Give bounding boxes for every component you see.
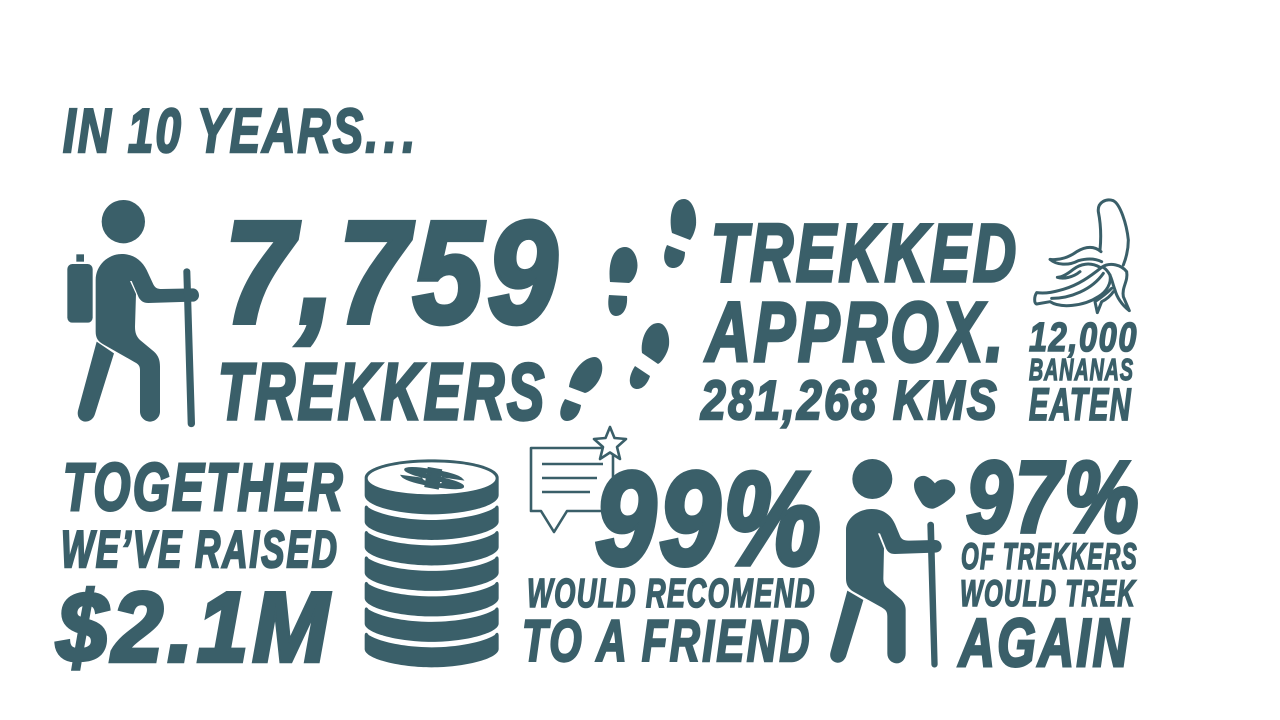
heading: together: TOGETHER	[63, 450, 345, 525]
icon: hiker with backpack	[67, 200, 199, 427]
icon: footprints	[560, 199, 696, 421]
stat: distance: 281,268 KMS	[700, 369, 999, 431]
label: would recommend: WOULD RECOMEND	[527, 570, 816, 616]
icon: banana	[1035, 200, 1129, 313]
label: would trek: WOULD TREK	[960, 573, 1136, 614]
stat: trek again percent: 97%	[966, 442, 1141, 554]
stat: bananas label: BANANAS	[1029, 352, 1134, 387]
heading: we've raised: WE’VE RAISED	[61, 521, 339, 579]
label: again: AGAIN	[958, 605, 1131, 681]
stat: trekkers number: 7,759	[225, 192, 562, 353]
heading: approx: APPROX.	[705, 285, 1006, 379]
stat: recommend percent: 99%	[595, 445, 824, 592]
label: of trekkers: OF TREKKERS	[961, 536, 1138, 577]
icon: hiker with heart	[830, 459, 955, 667]
label: to a friend: TO A FRIEND	[522, 609, 812, 674]
stat: bananas number: 12,000	[1029, 314, 1138, 360]
icon: coin stack: $	[402, 461, 464, 495]
heading: trekked: TREKKED	[711, 208, 1019, 299]
icon: review speech bubble with star	[531, 427, 626, 532]
stat: eaten label: EATEN	[1029, 379, 1132, 430]
title: IN 10 YEARS...	[63, 97, 421, 166]
icon: coin stack	[365, 459, 499, 667]
stat: amount raised: $2.1M	[56, 572, 333, 682]
stat: trekkers label: TREKKERS	[218, 347, 547, 436]
